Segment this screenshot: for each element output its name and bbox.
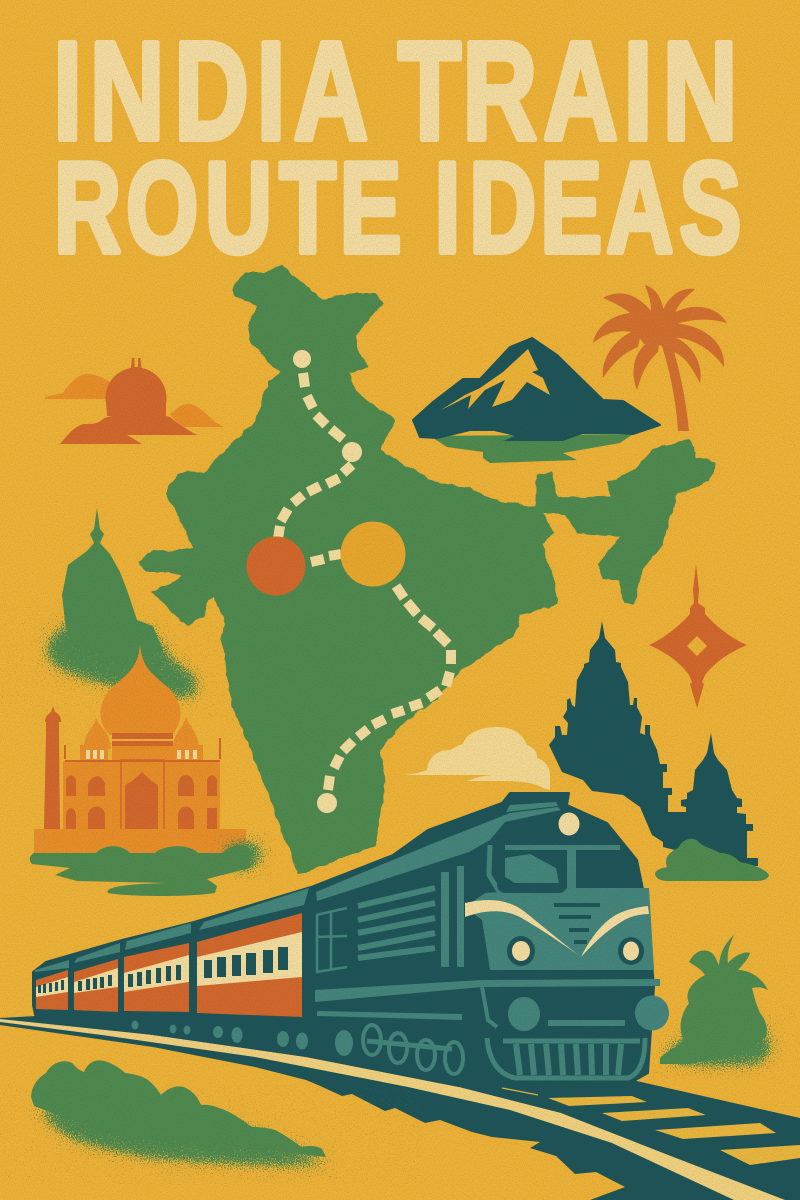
fronds xyxy=(603,293,652,316)
vertical side strips xyxy=(441,866,464,967)
coach 3 xyxy=(74,959,118,1012)
headlamp glass xyxy=(558,812,580,836)
top cap highlight xyxy=(506,802,558,812)
ground foliage under Taj xyxy=(30,841,263,896)
cream rail xyxy=(0,1019,785,1200)
running board xyxy=(315,979,660,1020)
right buffer xyxy=(635,996,669,1030)
bush: lower left shrub xyxy=(31,1060,334,1165)
bush: right pineapple shrub xyxy=(660,935,770,1066)
dashed train route xyxy=(246,350,451,813)
dome xyxy=(106,358,166,416)
cab front face xyxy=(465,888,654,970)
train silhouette xyxy=(33,793,654,1086)
nose grille lines xyxy=(554,903,600,944)
icon: dark temples xyxy=(549,621,758,866)
right marker light xyxy=(618,937,644,965)
icon: palm tree xyxy=(593,285,727,431)
side domes xyxy=(84,718,111,749)
map of India xyxy=(140,266,715,874)
icon: green temple silhouette xyxy=(46,508,198,698)
cab windows xyxy=(497,845,620,893)
coach 4 xyxy=(36,970,68,1010)
bush under temples xyxy=(655,839,769,881)
headlamp xyxy=(556,811,582,837)
coach roofs xyxy=(35,888,309,972)
left marker light xyxy=(507,936,535,966)
icon: Taj Mahal xyxy=(34,643,246,853)
railway track xyxy=(0,1016,800,1200)
orange cloud base xyxy=(60,414,197,444)
dark water reflection xyxy=(490,430,620,441)
lake xyxy=(430,434,633,463)
minaret xyxy=(44,706,61,829)
light clouds xyxy=(45,374,224,427)
steam cloud xyxy=(404,727,550,790)
left buffer xyxy=(508,997,540,1031)
trunk xyxy=(660,338,689,431)
small wheels xyxy=(132,1020,353,1056)
main building xyxy=(63,761,220,830)
cowcatcher xyxy=(487,1038,645,1078)
train xyxy=(33,793,669,1086)
coach 1 xyxy=(197,913,302,1017)
route stop: start xyxy=(293,350,311,368)
main dome xyxy=(100,643,181,735)
parapets xyxy=(80,745,203,761)
title: ROUTE IDEAS xyxy=(54,135,741,280)
route stop: north xyxy=(342,442,362,462)
driving wheels and rod xyxy=(363,1025,463,1074)
cream nose stripe xyxy=(465,900,649,957)
coach 2 xyxy=(124,943,189,1012)
title: INDIA TRAIN xyxy=(53,14,737,170)
icon: ornament star xyxy=(649,564,747,708)
icon: distant dome with clouds xyxy=(45,358,224,444)
title xyxy=(53,14,741,280)
snow cap xyxy=(441,349,550,410)
route stop: south xyxy=(317,793,337,813)
route hub: yellow xyxy=(340,522,406,586)
platform xyxy=(34,829,246,853)
route hub: orange xyxy=(246,536,306,596)
arches xyxy=(66,772,217,829)
icon: mountain xyxy=(413,338,660,463)
ballast and sleepers xyxy=(0,1016,800,1200)
locomotive side roof xyxy=(316,807,561,901)
side window grid xyxy=(316,908,347,972)
side vents xyxy=(358,888,435,958)
yellow sleepers xyxy=(548,1096,800,1165)
